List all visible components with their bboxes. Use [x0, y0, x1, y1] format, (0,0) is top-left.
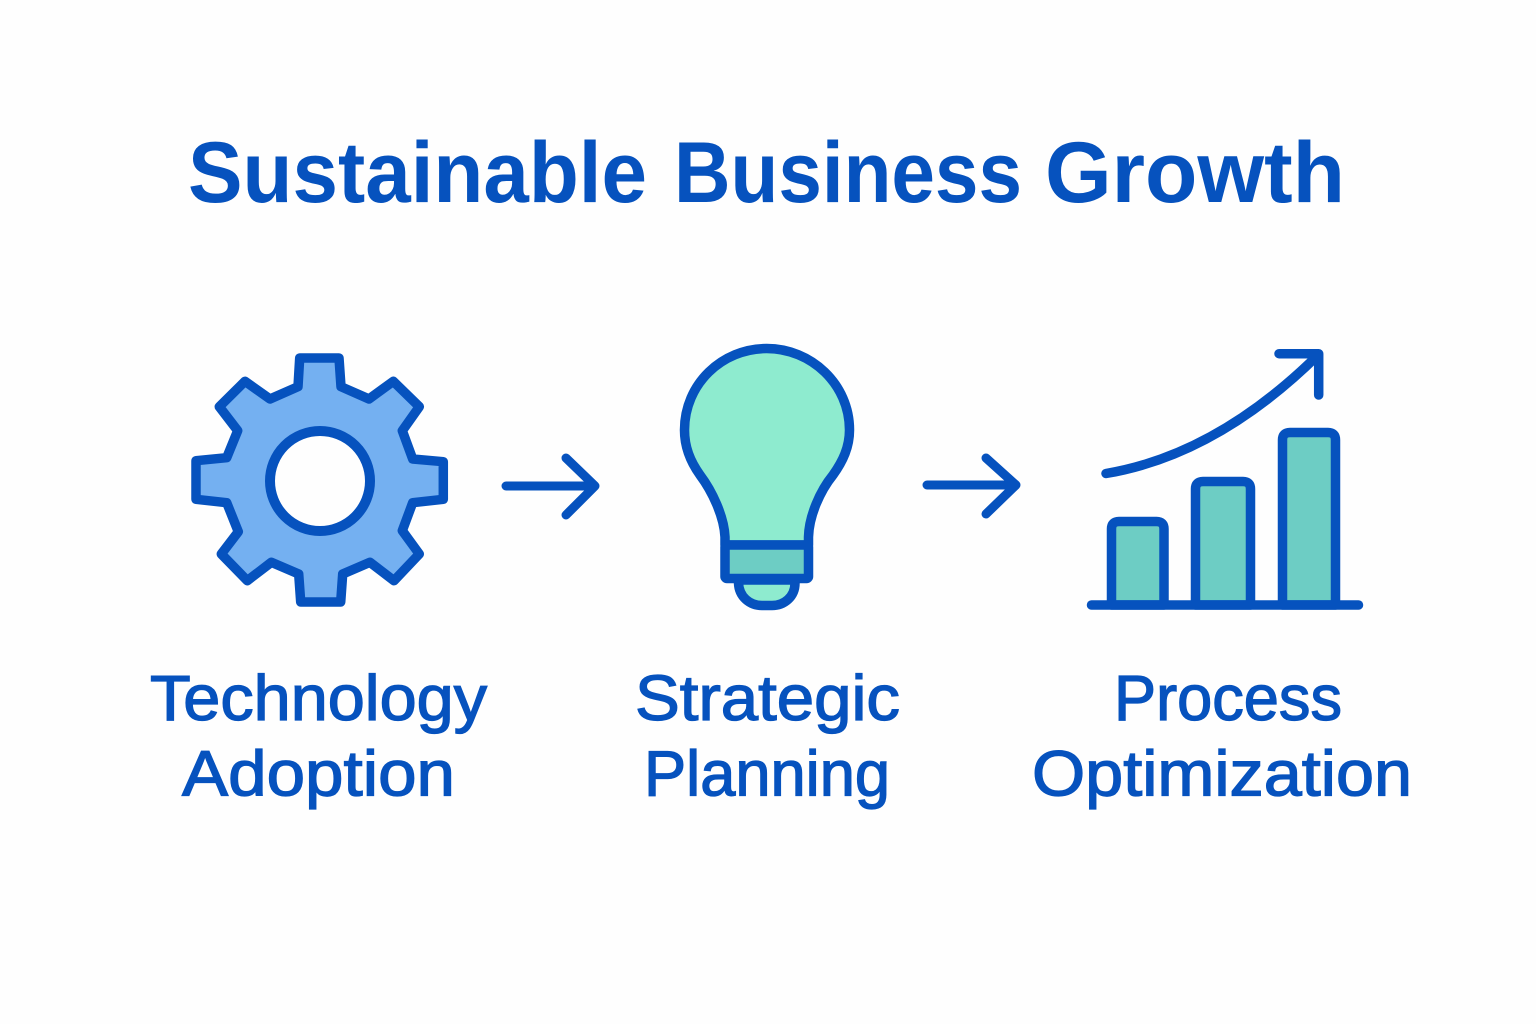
label: process optimization	[1032, 662, 1412, 810]
icon: light bulb	[684, 348, 850, 606]
label: process optimization: Process	[1114, 662, 1342, 734]
bar 2	[1196, 482, 1250, 605]
label: strategic planning: Planning	[644, 738, 890, 810]
label: process optimization: Optimization	[1032, 738, 1412, 810]
arrow: technology to planning	[506, 458, 595, 515]
label: technology adoption: Adoption	[182, 738, 455, 810]
title: Sustainable	[188, 125, 647, 221]
label: technology adoption	[150, 662, 487, 810]
growth arrow	[1106, 354, 1319, 474]
label: strategic planning: Strategic	[635, 662, 900, 734]
title: Growth	[1045, 125, 1345, 221]
bar 1	[1112, 522, 1164, 605]
arrow: planning to optimization	[927, 458, 1016, 514]
baseline	[1092, 600, 1358, 610]
icon: growth bar chart	[1092, 354, 1358, 605]
title	[188, 125, 1345, 221]
title: Business	[674, 125, 1022, 221]
label: strategic planning	[635, 662, 900, 810]
label: technology adoption: Technology	[150, 662, 487, 734]
icon: gear	[196, 358, 443, 602]
bar 3	[1282, 432, 1336, 605]
